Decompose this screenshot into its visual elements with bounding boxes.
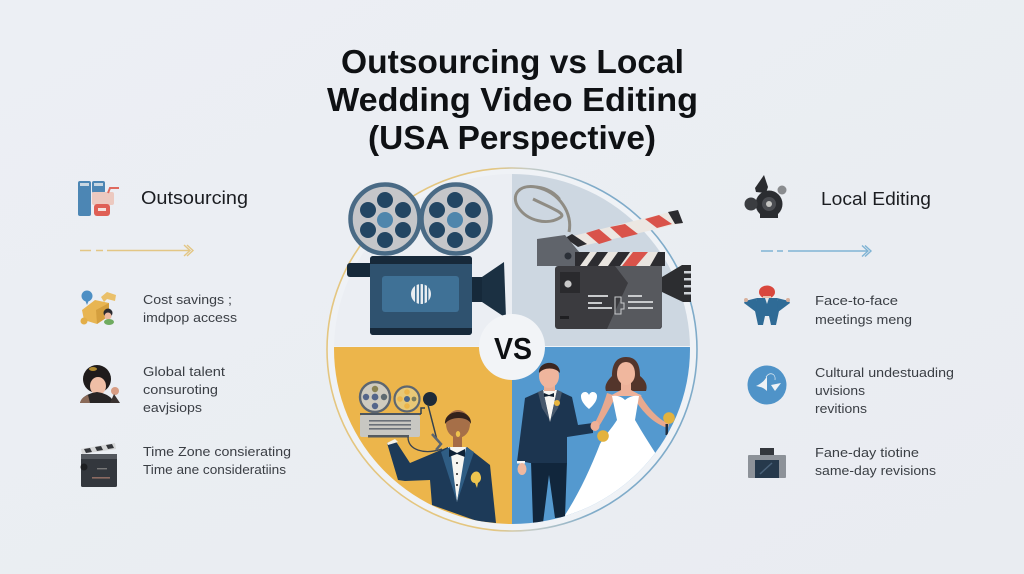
text: global talent: eavjsiops	[143, 400, 203, 415]
text: cultural understanding: Cultural undestuading	[815, 365, 954, 380]
icon: camera	[744, 175, 786, 218]
text: cost savings: Cost savings ;	[143, 292, 232, 307]
text: cultural understanding: revitions	[815, 401, 868, 416]
quadrant: blue wedding couple	[512, 347, 694, 530]
text: face-to-face: meetings meng	[815, 312, 912, 327]
quadrant: yellow outsourcing editor	[330, 347, 512, 527]
text: cultural understanding: uvisions	[815, 383, 866, 398]
text: time zone: Time ane consideratiins	[143, 462, 287, 477]
text: face-to-face: Face-to-face	[815, 293, 898, 308]
icon: film strip curl	[515, 187, 570, 232]
icon: person	[80, 365, 120, 403]
icon: monitor	[748, 448, 786, 478]
icon: clapperboard	[537, 210, 691, 329]
figure: man in tuxedo	[387, 410, 496, 523]
text: face-to-face	[815, 293, 912, 327]
icon: businessman	[744, 286, 790, 325]
figure: bride	[564, 357, 675, 516]
icon: heart	[581, 392, 597, 409]
text: time zone: Time Zone consierating	[143, 444, 291, 459]
arrow: local editing	[761, 246, 871, 256]
text: time zone	[143, 444, 291, 477]
panel: local editing	[744, 175, 954, 478]
title: Wedding Video Editing	[327, 82, 698, 119]
icon: film camera	[347, 184, 506, 335]
text: global talent: consuroting	[143, 382, 218, 397]
figure: groom	[517, 363, 609, 523]
icon: outsourcing servers	[78, 181, 119, 216]
arrow: outsourcing	[80, 245, 193, 256]
text: same-day revisions	[815, 445, 937, 478]
text: global talent	[143, 364, 225, 415]
title: Outsourcing vs Local	[341, 44, 684, 81]
VS badge: VS	[494, 331, 532, 366]
title	[327, 44, 698, 157]
panel: outsourcing	[78, 181, 291, 487]
quadrant: clapperboard on grey	[512, 170, 694, 346]
icon: clapperboard small	[80, 443, 117, 487]
text: cultural understanding	[815, 365, 954, 416]
heading: local editing: Local Editing	[821, 189, 931, 209]
VS badge	[479, 314, 545, 380]
central circle comparison	[327, 168, 697, 531]
text: cost savings: imdpoр access	[143, 310, 238, 325]
heading: outsourcing: Outsourcing	[141, 188, 248, 208]
icon: projector	[360, 382, 442, 452]
title: (USA Perspective)	[368, 120, 656, 157]
icon: globe handshake	[748, 366, 786, 404]
text: cost savings	[143, 292, 238, 325]
icon: cost savings	[80, 290, 116, 325]
text: global talent: Global talent	[143, 364, 225, 379]
text: same-day revisions: Fane-day tiotine	[815, 445, 919, 460]
text: same-day revisions: same-day revisions	[815, 463, 937, 478]
